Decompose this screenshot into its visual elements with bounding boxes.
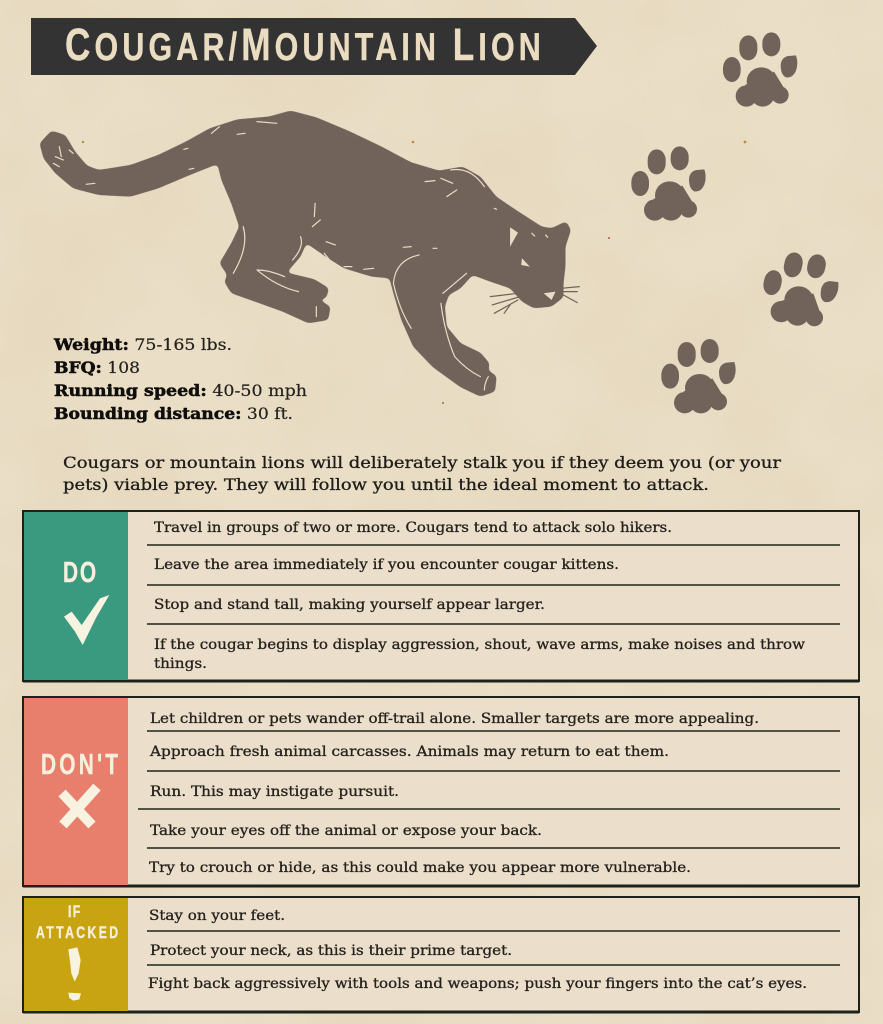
do item 1: Travel in groups of two or more. Cougars tend to attack solo hikers.: [154, 520, 672, 536]
don't item 4: Take your eyes off the animal or expose your back.: [150, 823, 542, 839]
intro text: [63, 454, 782, 494]
paw print 1: [723, 32, 797, 107]
intro text: Cougars or mountain lions will deliberately stalk you if they deem you (or your: [63, 454, 782, 472]
icon: cross mark: [62, 787, 97, 825]
icon: exclamation mark: [68, 947, 81, 1001]
stat: BFQ: BFQ: 108: [54, 358, 140, 377]
don't item 3: Run. This may instigate pursuit.: [150, 784, 399, 800]
do item 2: Leave the area immediately if you encounter cougar kittens.: [154, 557, 619, 573]
if attacked item 3: Fight back aggressively with tools and weapons; push your fingers into the cat’s eyes.: [148, 976, 807, 992]
cougar illustration: [40, 111, 579, 397]
cougar silhouette: [40, 111, 571, 397]
title: COUGAR/MOUNTAIN LION: [65, 19, 541, 70]
panel: if attacked: [23, 897, 859, 1012]
if attacked label: IF: [68, 903, 80, 922]
paw print 2: [631, 146, 706, 221]
don't label: DON'T: [41, 749, 119, 781]
don't item 1: Let children or pets wander off-trail alone. Smaller targets are more appealing.: [150, 711, 759, 727]
stat: bounding distance: Bounding distance: 30 ft.: [54, 404, 293, 423]
panel: don't: [23, 697, 859, 886]
icon: check mark: [64, 595, 109, 645]
paw print 3: [756, 244, 844, 333]
do label: DO: [63, 557, 96, 589]
paw prints: [631, 32, 844, 413]
if attacked label block: [24, 898, 128, 1011]
fur highlights: [53, 122, 548, 390]
do label block: [24, 512, 128, 680]
stat: weight: Weight: 75-165 lbs.: [53, 335, 232, 354]
intro text: pets) viable prey. They will follow you until the ideal moment to attack.: [63, 476, 709, 494]
if attacked label: [36, 903, 118, 943]
stat: running speed: Running speed: 40-50 mph: [54, 381, 307, 400]
if attacked item 2: Protect your neck, as this is their prime target.: [150, 943, 512, 959]
panel: do: [23, 511, 859, 681]
title banner: [31, 18, 597, 75]
if attacked label: ATTACKED: [36, 924, 118, 943]
don't label block: [24, 698, 128, 885]
whiskers: [490, 282, 579, 313]
cougar face markings: [510, 227, 556, 300]
cougar stats: [53, 335, 307, 423]
don't item 2: Approach fresh animal carcasses. Animals may return to eat them.: [149, 744, 669, 760]
paw print 4: [661, 339, 736, 413]
do item 3: Stop and stand tall, making yourself appear larger.: [154, 597, 545, 613]
don't item 5: Try to crouch or hide, as this could make you appear more vulnerable.: [149, 860, 691, 876]
do item 4: [154, 637, 805, 672]
do item 4: If the cougar begins to display aggression, shout, wave arms, make noises and throw: [154, 637, 805, 653]
if attacked item 1: Stay on your feet.: [149, 908, 285, 924]
do item 4: things.: [154, 656, 207, 672]
